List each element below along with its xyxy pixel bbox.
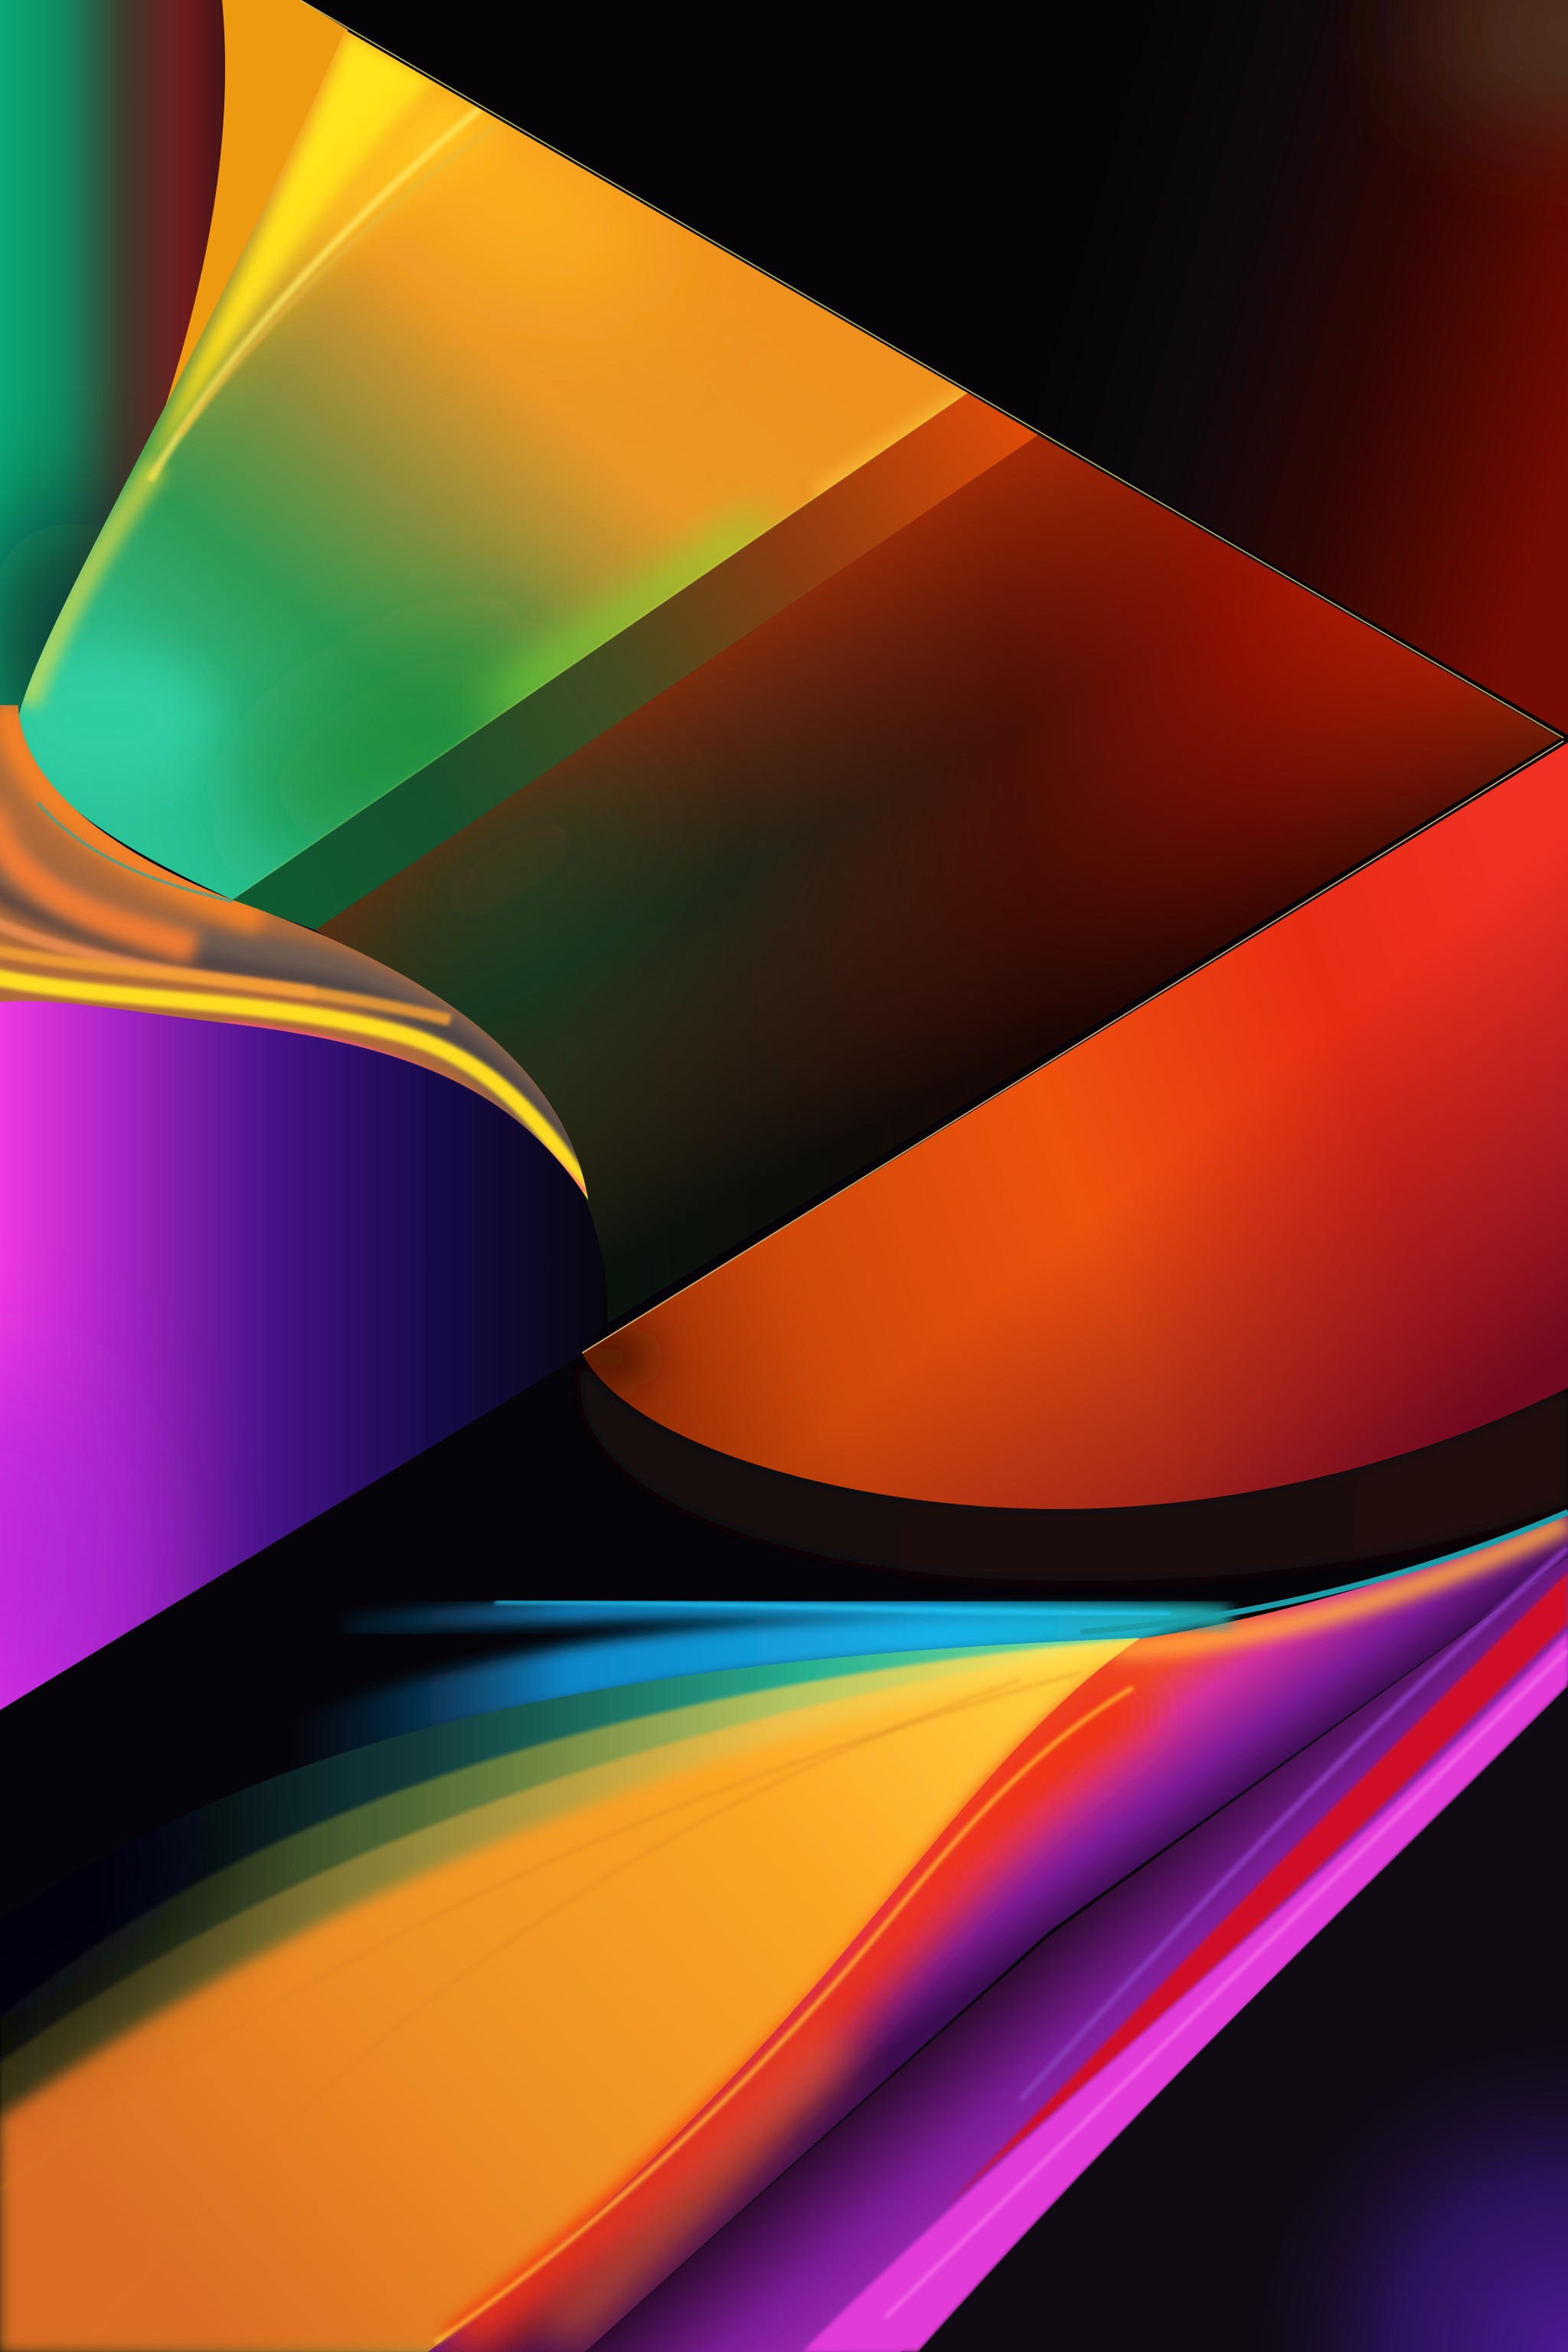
streak: red diagonal band bbox=[946, 1572, 1568, 2208]
panel: top left green to red strip bbox=[0, 0, 225, 715]
swoosh: left multicolour ribbon bbox=[0, 690, 600, 1215]
band: diagonal translucent band bbox=[233, 393, 1038, 930]
panel: red to dark green diamond bbox=[300, 420, 1568, 1350]
streak: blue highlight bbox=[345, 1512, 1568, 1632]
arc: dark shadow under orange lens bbox=[580, 1357, 1568, 1581]
panel: orange lower right lens bbox=[563, 735, 1568, 1515]
band: dark purple diagonal bbox=[585, 1557, 1568, 2352]
panel: orange lower fan with stacked ribbons bbox=[0, 1632, 1140, 2352]
panel: top right dark triangle bbox=[1167, 0, 1568, 735]
glow: blue band above fan bbox=[285, 1612, 1215, 1785]
panel: orange to green main panel bbox=[19, 31, 968, 900]
corner: dark lower right with purple glow bbox=[918, 1686, 1568, 2352]
line: violet thin highlights bbox=[885, 1548, 1568, 2318]
line: yellow highlight on fan edge bbox=[435, 1687, 1133, 2343]
ribbon: orange upper left ribbon bbox=[135, 0, 348, 495]
panel: purple left block bbox=[0, 1001, 608, 1710]
line: bright diagonal edges bbox=[300, 0, 1563, 1353]
streak: magenta diagonal band bbox=[802, 1632, 1568, 2352]
panel: magenta upper fan bbox=[420, 1500, 1568, 2352]
